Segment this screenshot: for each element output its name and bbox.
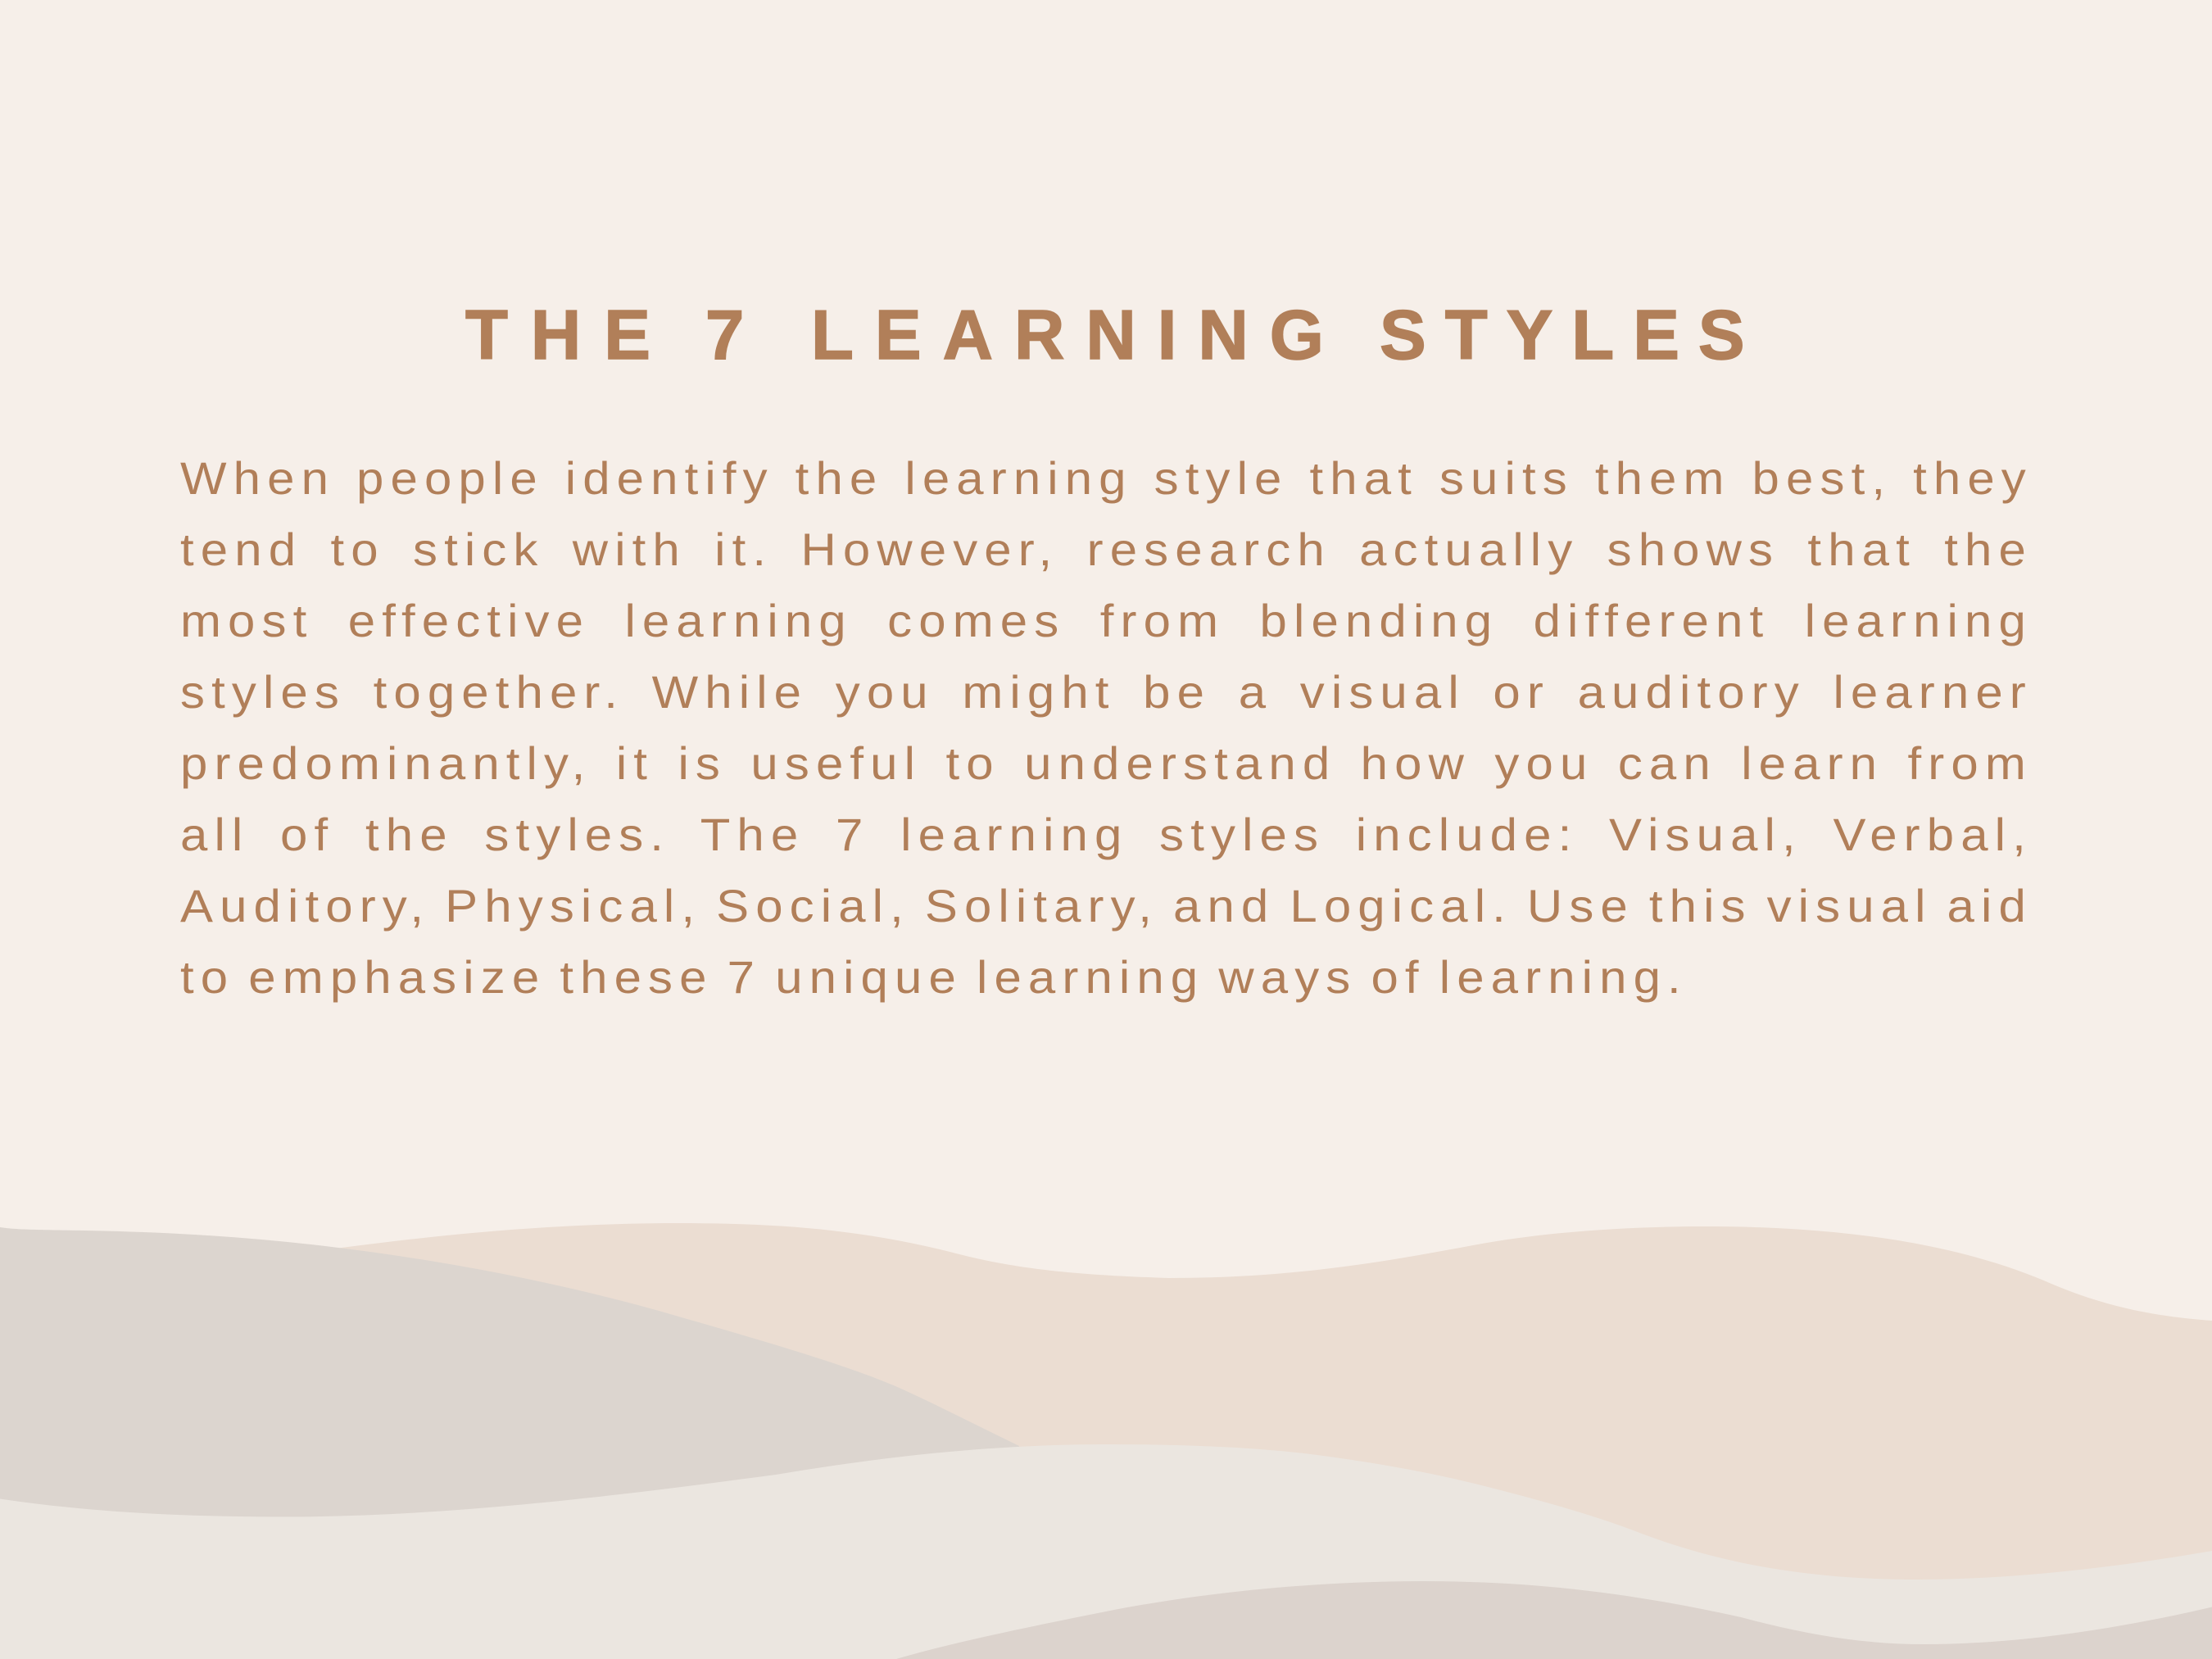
title: THE <box>465 297 673 374</box>
body paragraph: to emphasize these 7 unique learning ways of learning. <box>180 951 1688 1003</box>
body paragraph: tend to stick with it. However, research actually shows that the <box>180 524 2033 575</box>
body paragraph: When people identify the learning style that suits them best, they <box>180 452 2033 504</box>
hill: grey left mound <box>0 1227 1019 1557</box>
body paragraph: Auditory, Physical, Social, Solitary, and Logical. Use this visual aid <box>180 880 2033 931</box>
hill: tan back wave <box>311 1223 2212 1659</box>
hill: dark bottom wave <box>896 1581 2212 1659</box>
body paragraph: most effective learning comes from blending different learning <box>180 595 2033 646</box>
title: STYLES <box>1380 297 1764 374</box>
body paragraph: predominantly, it is useful to understand how you can learn from <box>180 737 2033 789</box>
hill: light middle wave <box>0 1444 2212 1659</box>
title: 7 <box>705 297 744 374</box>
title: LEARNING <box>811 297 1345 374</box>
body paragraph <box>180 452 2033 1003</box>
body paragraph: styles together. While you might be a visual or auditory learner <box>180 666 2033 718</box>
title <box>465 297 1764 374</box>
body paragraph: all of the styles. The 7 learning styles include: Visual, Verbal, <box>180 809 2033 860</box>
